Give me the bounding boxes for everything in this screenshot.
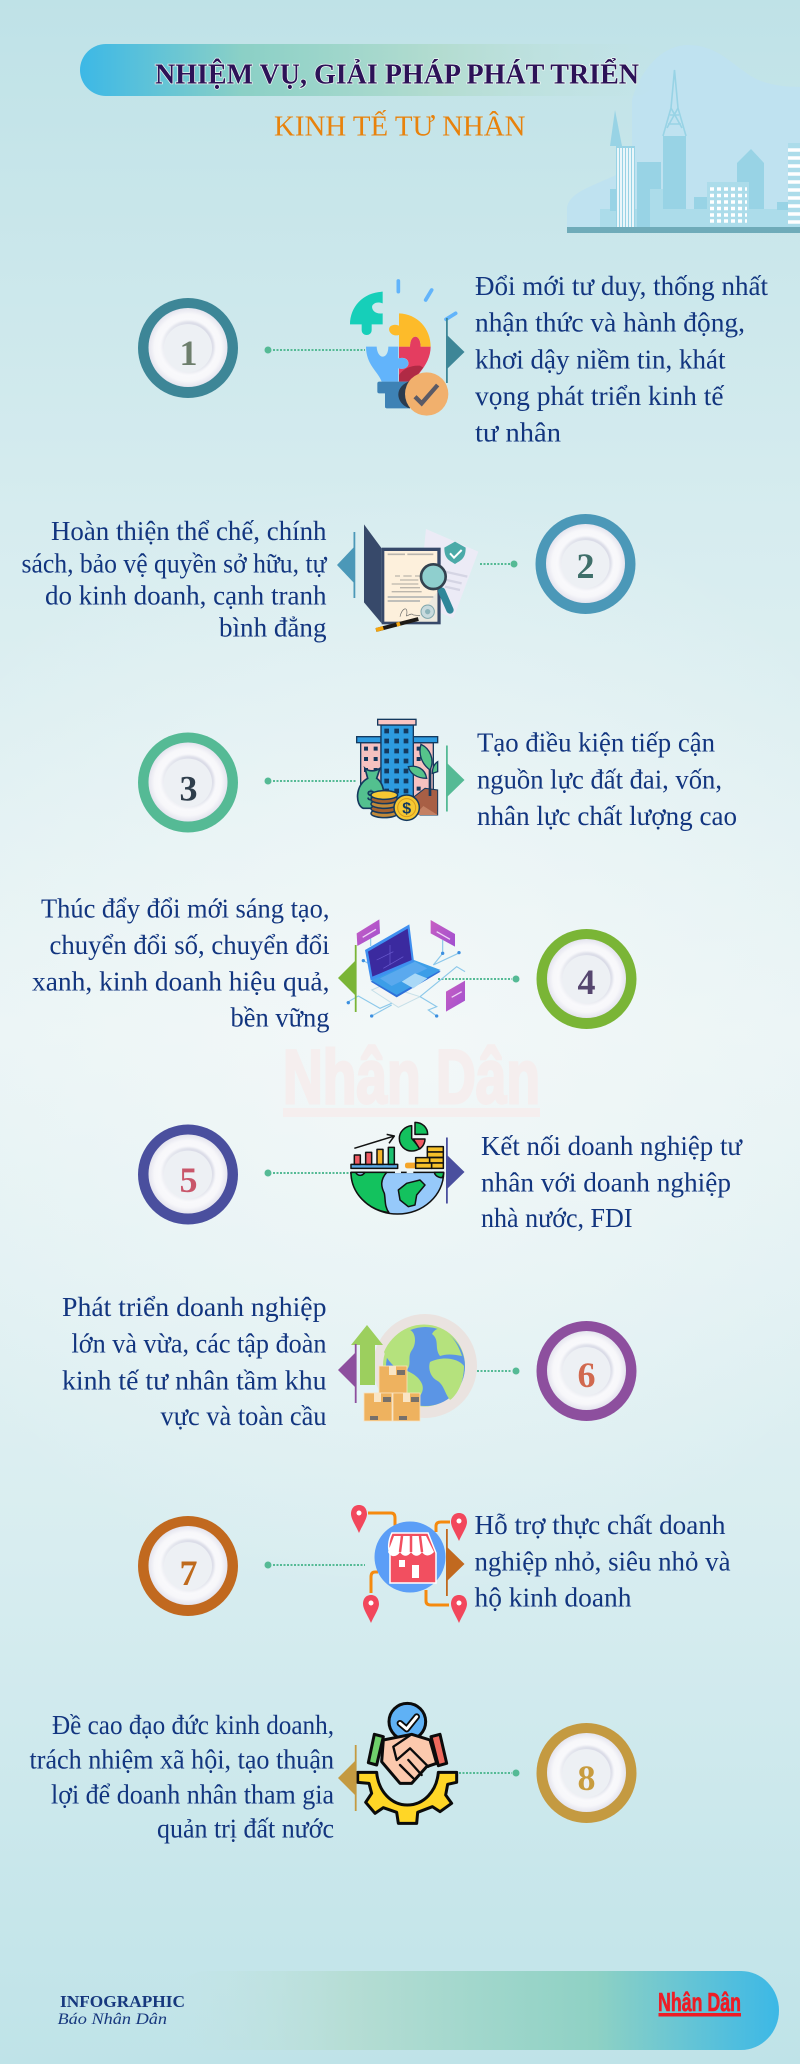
number badge 2 [536, 514, 636, 614]
icon: contract and magnifier [364, 524, 478, 630]
text 6: vực và toàn cầu [160, 1401, 327, 1431]
icon: laptop and circuits [347, 919, 465, 1018]
item 3 [138, 719, 737, 832]
footer credit [58, 1992, 185, 2028]
text 1: khơi dậy niềm tin, khát [475, 344, 726, 374]
number badge 3 [138, 732, 238, 832]
text 5: nhân với doanh nghiệp [481, 1168, 731, 1198]
text 2 [22, 516, 328, 642]
footer logo [658, 1987, 741, 2017]
arrow 4 [338, 945, 357, 1012]
icon: puzzle light bulb [350, 281, 456, 416]
text 2: bình đẳng [219, 612, 326, 642]
text 3: Tạo điều kiện tiếp cận [477, 728, 715, 758]
footer logo: Nhân Dân [658, 1987, 741, 2017]
connector 4 [438, 976, 520, 982]
text 1: vọng phát triển kinh tế [475, 381, 725, 411]
text 6 [62, 1292, 327, 1431]
number badge 1 [138, 298, 238, 398]
number badge 6: 6 [578, 1355, 596, 1395]
connector 8 [459, 1770, 520, 1776]
text 1: nhận thức và hành động, [475, 308, 745, 338]
footer bar [170, 1971, 779, 2050]
number badge 7 [138, 1516, 238, 1616]
item 5 [138, 1122, 743, 1233]
watermark: Nhân Dân [283, 1035, 540, 1120]
skyline illustration [567, 45, 800, 233]
text 5: nhà nước, FDI [481, 1203, 633, 1233]
text 8: quản trị đất nước [157, 1814, 334, 1844]
text 5 [481, 1131, 743, 1233]
connector 7 [264, 1562, 365, 1568]
text 5: Kết nối doanh nghiệp tư [481, 1131, 743, 1161]
connector 1 [264, 346, 365, 354]
text 1 [475, 271, 768, 448]
icon: buildings and money: $ [402, 800, 411, 817]
item 6 [62, 1292, 636, 1431]
number badge 2: 2 [576, 546, 594, 586]
connector 5 [264, 1170, 351, 1176]
arrow 7 [446, 1529, 464, 1596]
number badge 3: 3 [180, 768, 198, 808]
number badge 7: 7 [180, 1553, 198, 1593]
arrow 6 [338, 1344, 357, 1403]
text 8 [30, 1710, 334, 1844]
text 4: bền vững [230, 1002, 330, 1032]
text 6: lớn và vừa, các tập đoàn [72, 1328, 327, 1358]
number badge 4 [536, 929, 636, 1029]
text 3 [477, 728, 737, 831]
text 8: trách nhiệm xã hội, tạo thuận [30, 1744, 334, 1774]
text 2: sách, bảo vệ quyền sở hữu, tự [22, 548, 328, 578]
number badge 5 [138, 1124, 238, 1224]
icon: handshake and gear [358, 1703, 457, 1823]
text 8: Đề cao đạo đức kinh doanh, [52, 1710, 334, 1740]
number badge 6 [536, 1321, 636, 1421]
text 2: Hoàn thiện thể chế, chính [51, 516, 327, 546]
icon: buildings and money: $ [367, 789, 375, 805]
item 1 [138, 271, 768, 448]
icon: buildings and money [357, 719, 438, 820]
icon: store network [351, 1505, 467, 1623]
arrow 5 [446, 1138, 464, 1204]
text 7 [474, 1510, 731, 1612]
text 3: nguồn lực đất đai, vốn, [477, 764, 722, 794]
text 4: Thúc đẩy đổi mới sáng tạo, [41, 894, 330, 924]
connector 2 [480, 560, 518, 568]
text 4: chuyển đổi số, chuyển đổi [50, 930, 330, 960]
item 8 [30, 1703, 636, 1844]
connector 6 [477, 1368, 520, 1374]
text 7: nghiệp nhỏ, siêu nhỏ và [474, 1546, 731, 1576]
footer credit: INFOGRAPHIC [60, 1992, 185, 2011]
subtitle: KINH TẾ TƯ NHÂN [274, 110, 526, 142]
connector 3 [264, 778, 357, 784]
footer credit: Báo Nhân Dân [58, 2011, 167, 2028]
number badge 5: 5 [180, 1160, 198, 1200]
number badge 8: 8 [578, 1758, 596, 1798]
arrow 2 [337, 532, 355, 598]
item 2 [22, 514, 636, 642]
text 8: lợi để doanh nhân tham gia [51, 1780, 334, 1810]
text 3: nhân lực chất lượng cao [477, 801, 737, 831]
item 7 [138, 1505, 731, 1623]
number badge 1: 1 [180, 333, 198, 373]
text 7: hộ kinh doanh [474, 1582, 632, 1612]
arrow 1 [446, 318, 464, 383]
text 1: Đổi mới tư duy, thống nhất [475, 271, 768, 301]
text 6: kinh tế tư nhân tầm khu [62, 1366, 327, 1396]
icon: globe with charts [351, 1122, 444, 1214]
text 2: do kinh doanh, cạnh tranh [45, 580, 327, 610]
text 4 [32, 894, 330, 1032]
text 7: Hỗ trợ thực chất doanh [474, 1510, 726, 1540]
icon: globe, arrow and boxes [351, 1314, 477, 1421]
arrow 3 [446, 746, 464, 812]
number badge 4: 4 [578, 962, 596, 1002]
arrow 8 [338, 1745, 357, 1811]
title bar [80, 44, 660, 96]
text 6: Phát triển doanh nghiệp [62, 1292, 326, 1322]
number badge 8 [536, 1723, 636, 1823]
title: NHIỆM VỤ, GIẢI PHÁP PHÁT TRIỂN [155, 58, 639, 90]
text 4: xanh, kinh doanh hiệu quả, [32, 966, 330, 996]
text 1: tư nhân [475, 418, 562, 448]
item 4 [32, 894, 636, 1032]
